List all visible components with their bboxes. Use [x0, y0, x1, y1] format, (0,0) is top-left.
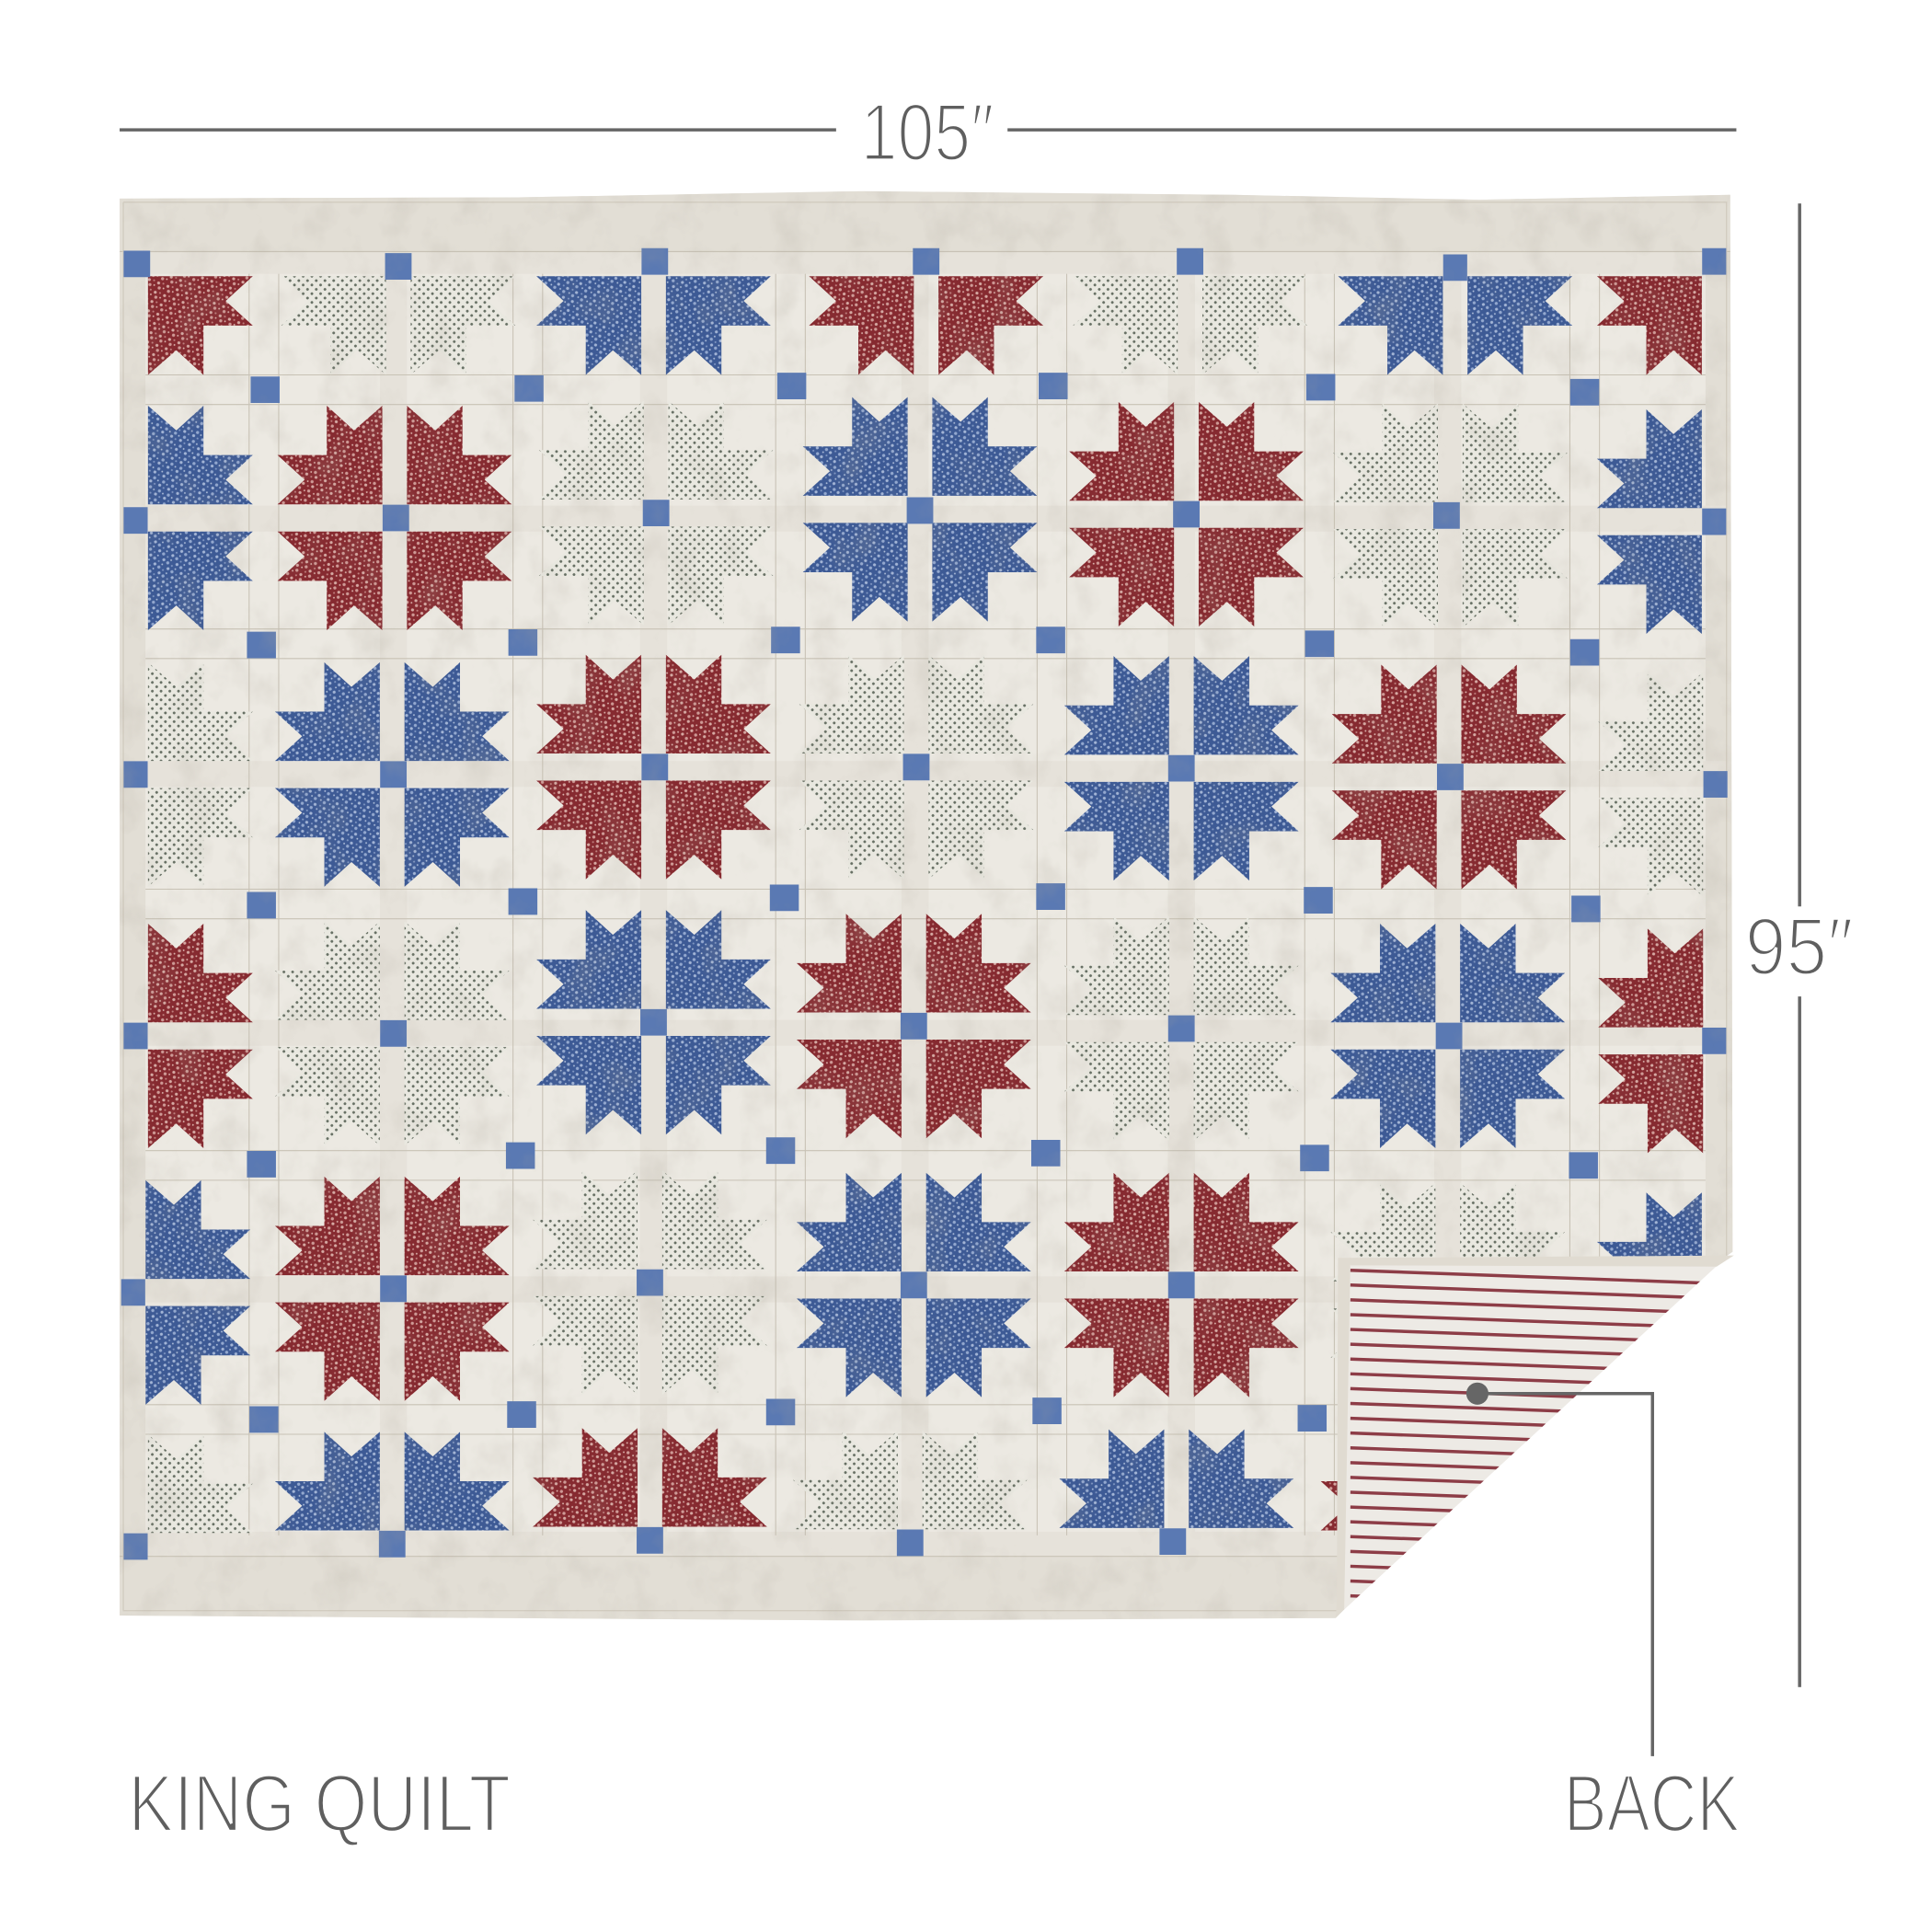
top fold hem [1350, 1256, 1734, 1267]
blue cornerstone squares [122, 249, 1727, 1558]
folded corner back [1336, 1256, 1734, 1618]
outer border bands [111, 185, 1739, 1627]
quilt fabric base [145, 274, 1706, 1532]
row 5 blocks [145, 1172, 1702, 1405]
row 6 blocks [147, 1428, 1338, 1533]
quilt front [120, 191, 1733, 1621]
sashing strips [123, 253, 1727, 1557]
row 3 blocks [147, 655, 1704, 894]
back label: BACK [1564, 1758, 1740, 1849]
fold hem band [1336, 1258, 1351, 1618]
row 1 blocks [147, 276, 1702, 375]
perimeter seam [123, 202, 1727, 1611]
back callout marker dot [1466, 1383, 1488, 1405]
height dimension: lower line [1798, 996, 1801, 1687]
striped back triangle [1344, 1260, 1723, 1609]
product name label: KING QUILT [128, 1758, 511, 1849]
height label: 95″ [1745, 901, 1854, 992]
wrinkle texture [111, 185, 1739, 1627]
back stripes [1351, 1271, 1727, 1609]
bear paw blocks [145, 276, 1704, 1595]
width dimension: left line [120, 128, 836, 132]
row 4 blocks [147, 910, 1704, 1154]
height dimension: upper line [1798, 203, 1801, 906]
stitching lines [120, 251, 1730, 1557]
width dimension: right line [1007, 128, 1736, 132]
row 2 blocks [147, 397, 1702, 634]
back callout leader line [1477, 1394, 1652, 1756]
width label: 105″ [861, 86, 994, 178]
